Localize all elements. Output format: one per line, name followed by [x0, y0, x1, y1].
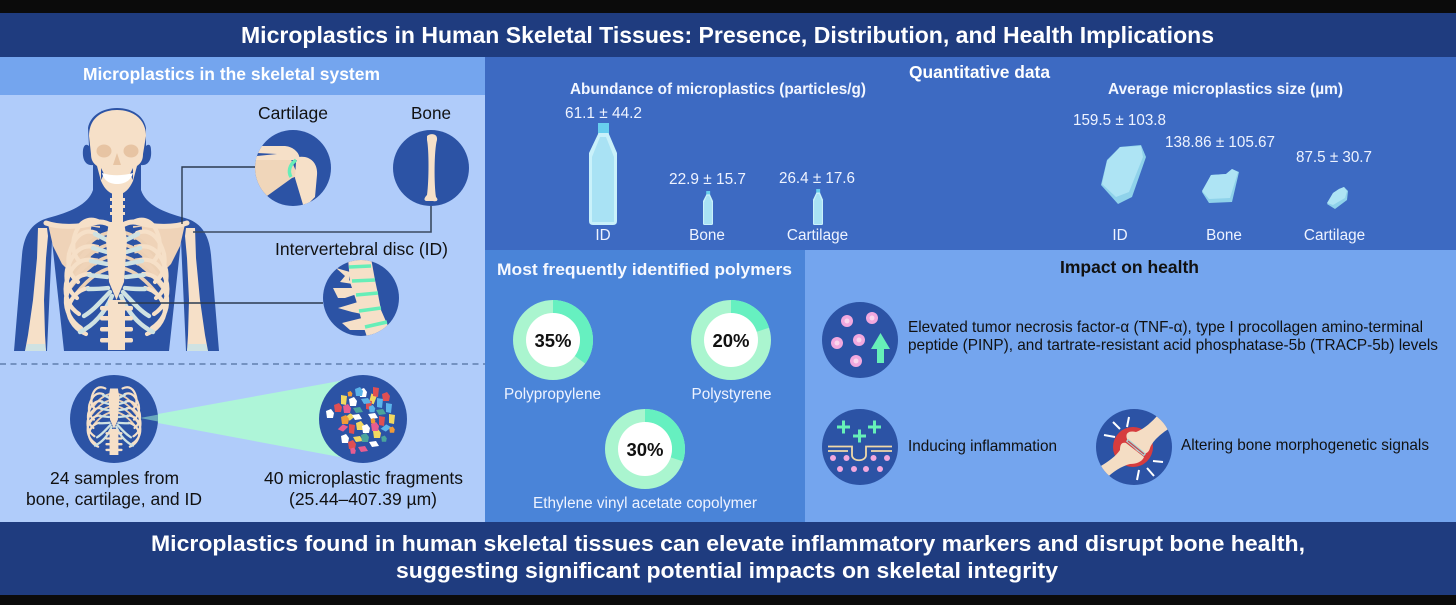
panel: impact on health [805, 250, 1456, 522]
chart: abundance of microplastics: 22.9 ± 15.7 [669, 171, 746, 188]
panel: microplastics in the skeletal system [0, 57, 485, 522]
panel heading: skeletal system: Microplastics in the skeletal system [83, 64, 380, 84]
chart: average microplastics size: Cartilage [1304, 227, 1365, 244]
chart: abundance of microplastics: Cartilage [787, 227, 848, 244]
donut: ethylene vinyl acetate copolymer 30%: 30% [626, 439, 664, 460]
caption: samples: bone, cartilage, and ID [26, 489, 202, 509]
icon: spine with discs [323, 258, 399, 340]
donut: polystyrene 20%: 20% [712, 330, 750, 351]
heading: impact on health: Impact on health [1060, 257, 1199, 277]
heading: quantitative data: Quantitative data [909, 62, 1050, 82]
chart: average microplastics size: Average microplastics size (µm) [1108, 81, 1343, 98]
conclusion banner [0, 522, 1456, 595]
divider: dashed [0, 363, 485, 365]
skull [89, 110, 146, 195]
collar bones [46, 222, 187, 226]
chart: abundance of microplastics: 26.4 ± 17.6 [779, 170, 855, 187]
chart: average microplastics size: 87.5 ± 30.7 [1296, 149, 1372, 166]
connector: bone [193, 206, 431, 232]
title banner [0, 13, 1456, 57]
chart: abundance of microplastics: Bone [689, 227, 725, 244]
shoulder blades [48, 224, 185, 278]
panel: quantitative data [485, 57, 1456, 250]
donut: ethylene vinyl acetate copolymer 30% [533, 409, 757, 512]
donut: polypropylene 35% [504, 300, 601, 403]
title banner: Microplastics in Human Skeletal Tissues: Presence, Distribution, and Health Implications [241, 22, 1214, 48]
donut: polypropylene 35%: Polypropylene [504, 386, 601, 403]
donut: polystyrene 20%: Polystyrene [692, 386, 771, 403]
caption: samples: 24 samples from [50, 468, 179, 488]
icon: inflammation [822, 409, 898, 485]
conclusion banner: suggesting significant potential impacts on skeletal integrity [396, 558, 1059, 583]
chart: average microplastics size: ID [1112, 227, 1128, 244]
icon: long bone [393, 130, 469, 206]
chart: average microplastics size: 159.5 ± 103.8 [1073, 112, 1166, 129]
rib cage [66, 220, 167, 350]
text: bone morphogenetic signals: Altering bone morphogenetic signals [1181, 437, 1429, 454]
text: elevated markers: Elevated tumor necrosis factor-α (TNF-α), type I procollagen amino-terminal [908, 319, 1423, 336]
donut: polypropylene 35%: 35% [534, 330, 572, 351]
panel: most frequently identified polymers [485, 250, 805, 522]
connector: cartilage [182, 167, 255, 224]
chart: average microplastics size: 138.86 ± 105.67 [1165, 134, 1275, 151]
text: elevated markers: peptide (PINP), and tartrate-resistant acid phosphatase-5b (TRACP-5b) levels [908, 337, 1438, 354]
gaps between ribs [80, 229, 153, 296]
icon: bone joint [1096, 409, 1172, 485]
human body silhouette with skeleton [14, 108, 219, 351]
chart: average microplastics size: Bone [1206, 227, 1242, 244]
caption: fragments: 40 microplastic fragments [264, 468, 463, 488]
bone label: Bone [411, 103, 451, 123]
connector: intervertebral disc [118, 302, 323, 304]
chart: abundance of microplastics [565, 81, 866, 244]
top black bar [0, 0, 1456, 13]
caption: fragments: (25.44–407.39 µm) [289, 489, 437, 509]
conclusion banner: Microplastics found in human skeletal tissues can elevate inflammatory markers and disrupt bone health, [151, 531, 1305, 556]
magnification cone [158, 380, 345, 458]
heading: polymers: Most frequently identified polymers [497, 260, 792, 279]
arm bones [25, 228, 48, 351]
chart: average microplastics size [1073, 81, 1372, 244]
donut: ethylene vinyl acetate copolymer 30%: Ethylene vinyl acetate copolymer [533, 495, 757, 512]
chart: abundance of microplastics: 61.1 ± 44.2 [565, 105, 642, 122]
icon: microplastic fragments [319, 375, 407, 463]
text: inflammation: Inducing inflammation [908, 438, 1057, 455]
chart: abundance of microplastics: Abundance of microplastics (particles/g) [570, 81, 866, 98]
icon: rib cage sample [70, 375, 158, 463]
neck vertebrae [110, 193, 125, 227]
chart: abundance of microplastics: ID [595, 227, 611, 244]
icon: shoulder cartilage [254, 130, 331, 208]
donut: polystyrene 20% [691, 300, 771, 403]
icon: elevated markers [822, 302, 898, 378]
bottom black bar [0, 595, 1456, 605]
intervertebral disc label: Intervertebral disc (ID) [275, 239, 448, 259]
cartilage label: Cartilage [258, 103, 328, 123]
